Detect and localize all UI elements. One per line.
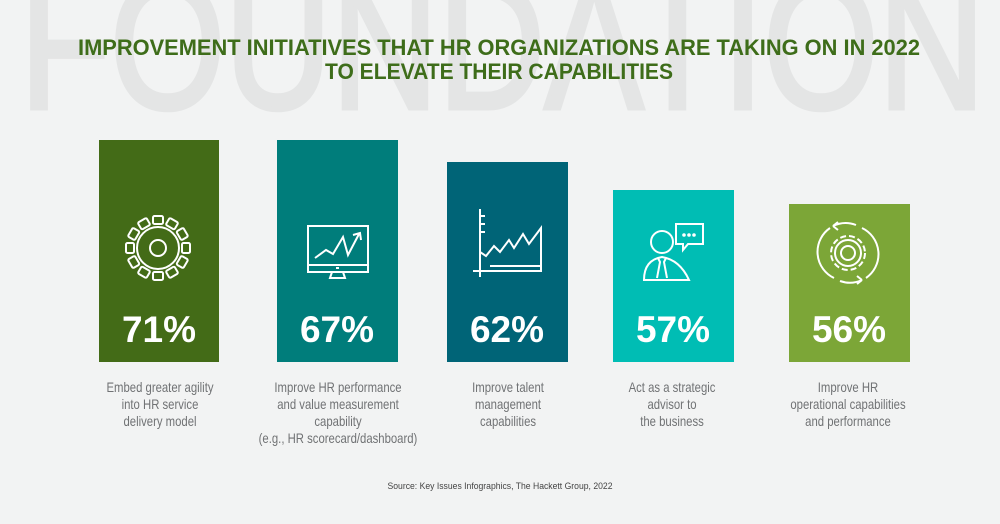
source: Source: Key Issues Infographics, The Hackett Group, 2022	[388, 481, 612, 491]
icon: line chart	[473, 209, 542, 277]
label 2: and value measurement	[277, 397, 399, 412]
label 2: Improve HR performance	[274, 380, 402, 395]
label 5	[790, 380, 906, 429]
label 3: Improve talent	[472, 380, 544, 395]
label 3: management	[475, 397, 542, 412]
bar 5: 56%	[789, 204, 910, 362]
label 1: delivery model	[123, 414, 197, 429]
icon: gear with segments	[126, 216, 190, 280]
label 3	[472, 380, 544, 429]
title: TO ELEVATE THEIR CAPABILITIES	[325, 59, 673, 84]
title	[78, 35, 920, 84]
bar 4: 57%: 57%	[636, 309, 710, 350]
label 4: Act as a strategic	[629, 380, 715, 395]
label 1: Embed greater agility	[106, 380, 214, 395]
bar 5: 56%: 56%	[812, 309, 886, 350]
label 2	[259, 380, 417, 446]
label 4: advisor to	[647, 397, 697, 412]
label 2: (e.g., HR scorecard/dashboard)	[259, 431, 417, 446]
labels	[106, 380, 906, 446]
icon: monitor with chart	[308, 226, 368, 278]
label 4: the business	[640, 414, 704, 429]
label 1: into HR service	[122, 397, 198, 412]
title: IMPROVEMENT INITIATIVES THAT HR ORGANIZATIONS ARE TAKING ON IN 2022	[78, 35, 920, 60]
icon: gear with cycle arrows	[818, 222, 878, 284]
bar 2: 67%	[277, 140, 398, 362]
label 5: and performance	[805, 414, 891, 429]
label 1	[106, 380, 214, 429]
bar 3: 62%	[447, 162, 568, 362]
label 3: capabilities	[480, 414, 536, 429]
bar 1: 71%: 71%	[122, 309, 196, 350]
label 5: Improve HR	[818, 380, 878, 395]
bar 1: 71%	[99, 140, 219, 362]
icon: advisor with speech bubble	[644, 224, 703, 280]
label 5: operational capabilities	[790, 397, 906, 412]
label 2: capability	[314, 414, 362, 429]
bar 4: 57%	[613, 190, 734, 362]
bar 2: 67%: 67%	[300, 309, 374, 350]
bar 3: 62%: 62%	[470, 309, 544, 350]
label 4	[629, 380, 715, 429]
